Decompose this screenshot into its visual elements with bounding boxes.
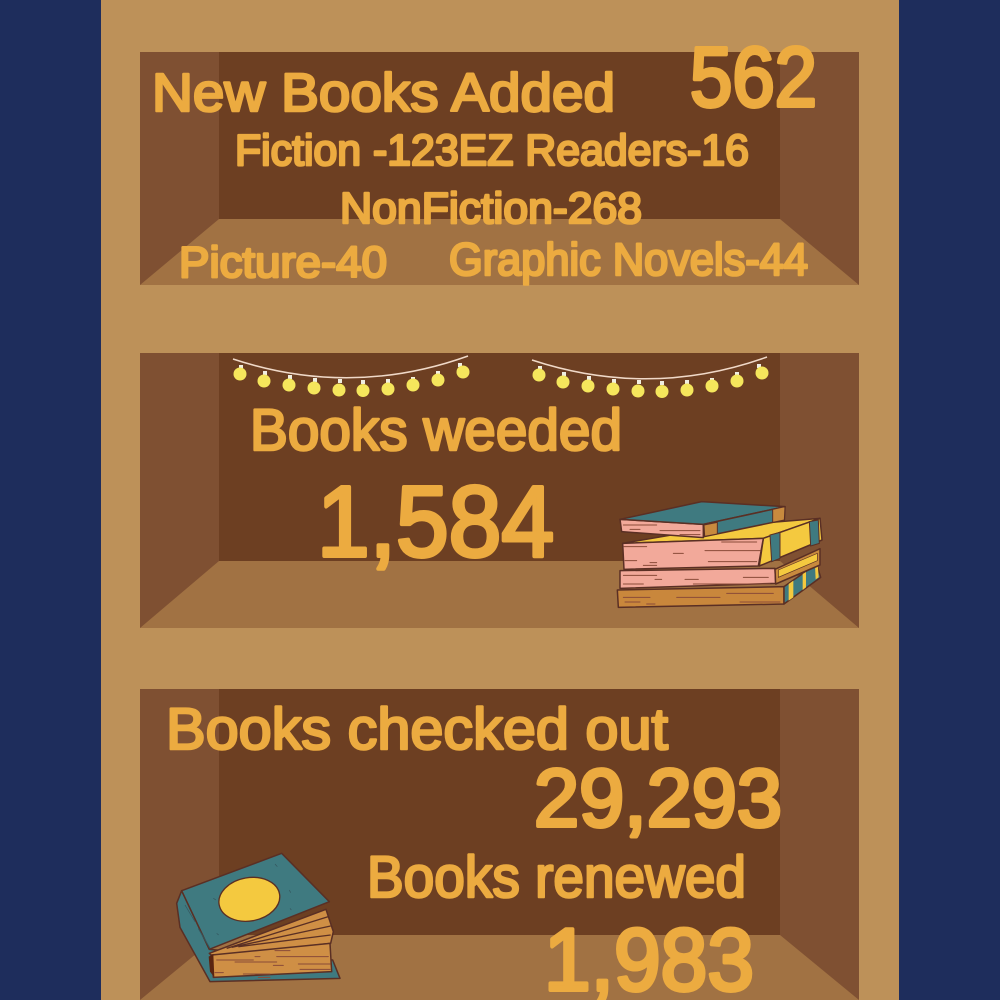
bookcase frame [101, 0, 899, 1000]
text: picture: Picture-40 [179, 238, 387, 287]
number: 1,584: 1,584 [317, 466, 554, 578]
string lights left [233, 356, 470, 397]
icon: stack of books [617, 502, 822, 607]
icon: open book [177, 853, 340, 982]
number: 29,293: 29,293 [534, 753, 782, 844]
heading: new books added: New Books Added [152, 63, 615, 123]
panel: new books added [140, 30, 859, 287]
number: 562: 562 [690, 30, 817, 124]
string lights right [532, 357, 768, 398]
text: graphic novels: Graphic Novels-44 [449, 234, 808, 285]
heading: books renewed: Books renewed [367, 845, 746, 910]
panel: books checked out and renewed [140, 689, 859, 1000]
shelf 3 compartment [140, 689, 859, 1000]
heading: books weeded: Books weeded [250, 398, 622, 463]
shelf 2 compartment [140, 353, 859, 628]
text: nonfiction: NonFiction-268 [340, 184, 642, 233]
heading: books checked out: Books checked out [166, 697, 668, 762]
shelf 1 compartment [140, 52, 859, 285]
text: fiction and EZ readers: Fiction -123EZ Readers-16 [235, 126, 749, 175]
panel: books weeded [140, 353, 859, 628]
